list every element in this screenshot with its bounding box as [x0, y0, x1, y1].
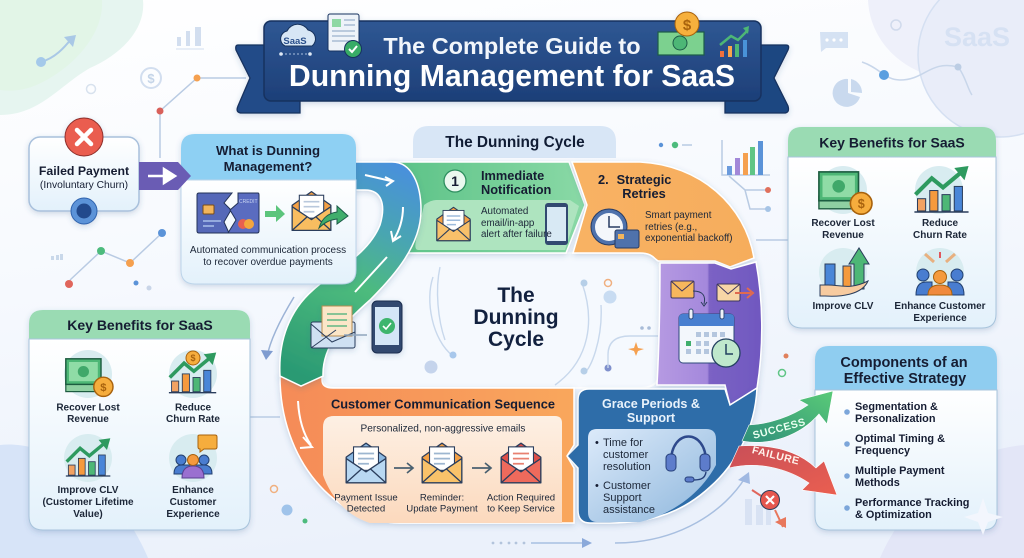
- body text: Smart payment: [645, 210, 712, 221]
- icon: envelope with arrow: [292, 192, 348, 230]
- bullet text: [595, 437, 655, 516]
- benefit: recover lost revenue: Revenue: [67, 414, 109, 425]
- envelope: payment issue detected: Detected: [347, 504, 385, 514]
- benefit: improve clv: Improve CLV: [813, 301, 874, 312]
- heading: [840, 355, 968, 387]
- benefit: reduce churn rate: $: [190, 353, 196, 363]
- inner panel: [323, 416, 562, 523]
- benefit: reduce churn rate: Reduce: [922, 218, 958, 229]
- benefit: recover lost revenue: Revenue: [822, 230, 864, 241]
- heading: Effective Strategy: [844, 371, 966, 387]
- icon: red x: [65, 118, 103, 156]
- body text: Automated: [481, 206, 528, 217]
- decorative background icons: $: [147, 71, 155, 86]
- benefit: improve clv: Value): [73, 509, 103, 520]
- inner panel: [415, 200, 579, 250]
- envelope: action required: to Keep Service: [487, 504, 555, 514]
- step: customer communication sequence: [280, 376, 574, 523]
- benefit: improve clv: [813, 248, 874, 312]
- heading: [602, 397, 700, 425]
- panel: what is dunning management: [181, 134, 356, 284]
- body text: exponential backoff): [645, 233, 733, 244]
- envelope: action required: [487, 443, 555, 514]
- number badge: [444, 170, 466, 192]
- panel: the dunning cycle heading: [413, 126, 616, 158]
- body text: to recover overdue payments: [203, 257, 333, 268]
- failed payment box: [29, 118, 139, 224]
- icon: document check: [328, 14, 362, 58]
- arrow: success: SUCCESS: [751, 416, 807, 442]
- heading: Components of an: [840, 355, 968, 371]
- icon: broken credit card: [197, 193, 259, 233]
- strategy list: Frequency: [855, 445, 910, 457]
- heading: Notification: [481, 182, 552, 197]
- benefit: enhance customer experience: Enhance Customer: [894, 301, 986, 312]
- body text: [645, 210, 733, 244]
- benefit: recover lost revenue: Recover Lost: [56, 402, 120, 414]
- icon: green arrow: [265, 205, 285, 222]
- benefit: recover lost revenue: [811, 166, 875, 241]
- background: SaaS: [944, 22, 1010, 52]
- arrow: [472, 463, 491, 473]
- benefit: reduce churn rate: [913, 166, 969, 241]
- benefit: reduce churn rate: [166, 350, 220, 425]
- banner title text: The Complete Guide to: [383, 33, 641, 59]
- heading: Immediate: [481, 168, 544, 183]
- heading: Management?: [224, 159, 312, 174]
- subhead: Personalized, non-aggressive emails: [361, 424, 525, 434]
- benefit: enhance customer experience: Experience: [913, 313, 967, 324]
- the dunning cycle text: Dunning: [473, 306, 559, 329]
- step 3: purple scheduling: [657, 262, 762, 405]
- benefit: enhance customer experience: Experience: [166, 509, 220, 520]
- body text: alert after failure: [481, 229, 552, 240]
- banner title text: Dunning Management for SaaS: [289, 60, 735, 93]
- icon: clock and card: [591, 209, 639, 248]
- icon: SaaS cloud: SaaS: [283, 36, 307, 47]
- benefit: reduce churn rate: Churn Rate: [166, 414, 220, 425]
- panel: key benefits left: Key Benefits for SaaS: [67, 317, 213, 333]
- strategy list: Personalization: [855, 413, 936, 425]
- panel: components of an effective strategy: [815, 346, 997, 530]
- ribbon right tail: [725, 45, 789, 113]
- body text: retries (e.g.,: [645, 222, 697, 233]
- icon: broken credit card: CREDIT: [239, 199, 258, 205]
- icon: cash and coin: $: [683, 17, 692, 34]
- heading: Support: [627, 411, 676, 425]
- icon: blue node: [71, 198, 97, 224]
- arrow: failure: [729, 444, 837, 495]
- envelope: reminder: Update Payment: [406, 504, 478, 514]
- envelope: reminder: [406, 443, 478, 514]
- bullet text: resolution: [603, 461, 651, 473]
- strategy list: Multiple Payment: [855, 465, 945, 477]
- benefit: reduce churn rate: Churn Rate: [913, 230, 967, 241]
- failed payment text: Failed Payment: [39, 164, 129, 178]
- benefit: improve clv: Improve CLV: [58, 485, 119, 496]
- heading: Customer Communication Sequence: [331, 396, 555, 412]
- icon: calendar and clock: [679, 309, 740, 367]
- panel: key benefits right: Key Benefits for SaaS: [819, 134, 965, 150]
- heading: [481, 168, 552, 197]
- panel: the dunning cycle center: [323, 253, 660, 388]
- heading: [216, 143, 320, 174]
- strategy list: Performance Tracking: [855, 497, 969, 509]
- heading: [598, 172, 671, 201]
- strategy list: Methods: [855, 477, 900, 489]
- icon: cash and coin: [658, 12, 704, 55]
- benefit: enhance customer experience: [166, 434, 220, 520]
- panel: key benefits left: [29, 310, 250, 530]
- the dunning cycle text: Cycle: [488, 328, 544, 351]
- strategy list: Segmentation &: [855, 401, 938, 413]
- heading: 2.: [598, 172, 609, 187]
- benefit: reduce churn rate: Reduce: [175, 402, 211, 414]
- bullet text: customer: [603, 449, 649, 461]
- benefit: improve clv: (Customer Lifetime: [42, 497, 134, 508]
- ribbon left tail: [236, 45, 300, 113]
- body text: Automated communication process: [190, 245, 346, 256]
- bullet text: Customer: [603, 480, 651, 492]
- panel: key benefits right: [788, 127, 996, 328]
- arrow: [394, 463, 413, 473]
- road: blue to green band: [280, 162, 421, 386]
- envelope: action required: Action Required: [487, 492, 555, 504]
- benefit: recover lost revenue: Recover Lost: [811, 218, 875, 229]
- step 2: strategic retries: [572, 162, 754, 267]
- body text: [190, 245, 346, 268]
- bullet text: Support: [603, 492, 642, 504]
- body text: [481, 206, 552, 240]
- icon: envelope and phone: [311, 301, 402, 353]
- step 4: grace periods and support: [567, 388, 757, 523]
- icon: headset: [666, 436, 710, 482]
- benefit: enhance customer experience: Customer: [170, 497, 216, 508]
- benefit: enhance customer experience: Enhance: [172, 485, 214, 496]
- failed payment text: (Involuntary Churn): [40, 180, 128, 191]
- icon: SaaS cloud: [279, 24, 316, 56]
- heading: Strategic: [617, 172, 671, 187]
- strategy list: [844, 401, 969, 521]
- icon: growth chart: [720, 26, 749, 57]
- benefit: recover lost revenue: [56, 350, 120, 425]
- panel: the dunning cycle heading: The Dunning Cycle: [445, 134, 585, 151]
- bullet text: •: [595, 437, 599, 449]
- heading: Retries: [622, 186, 666, 201]
- arrow: failed payment to dunning: [139, 162, 191, 190]
- icon: phone: [545, 203, 568, 245]
- body text: email/in-app: [481, 218, 535, 229]
- strategy list: Optimal Timing &: [855, 433, 945, 445]
- envelope: reminder: Reminder:: [420, 492, 464, 504]
- inner panel: [588, 429, 716, 522]
- envelope: payment issue detected: Payment Issue: [334, 492, 398, 504]
- the dunning cycle text: [473, 284, 559, 351]
- bullet text: assistance: [603, 504, 655, 516]
- benefit: enhance customer experience: [894, 248, 986, 324]
- icon: envelope: [437, 207, 470, 241]
- the dunning cycle text: The: [497, 284, 535, 307]
- title banner: [236, 12, 789, 113]
- heading: Grace Periods &: [602, 397, 700, 411]
- strategy list: & Optimization: [855, 509, 932, 521]
- envelope: payment issue detected: [334, 443, 398, 514]
- icon: envelopes: [671, 281, 753, 306]
- bullet text: Time for: [603, 437, 643, 449]
- banner title text: [289, 33, 735, 93]
- failed payment text: [39, 164, 129, 191]
- arrow: success: [742, 391, 833, 442]
- heading: What is Dunning: [216, 143, 320, 158]
- arrow: failure: FAILURE: [751, 444, 801, 468]
- number badge: 1: [451, 173, 459, 189]
- bullet text: •: [595, 480, 599, 492]
- sparkle: [964, 498, 1003, 535]
- benefit: improve clv: [42, 434, 134, 520]
- banner body: [264, 21, 761, 101]
- step 1: immediate notification: [375, 162, 585, 253]
